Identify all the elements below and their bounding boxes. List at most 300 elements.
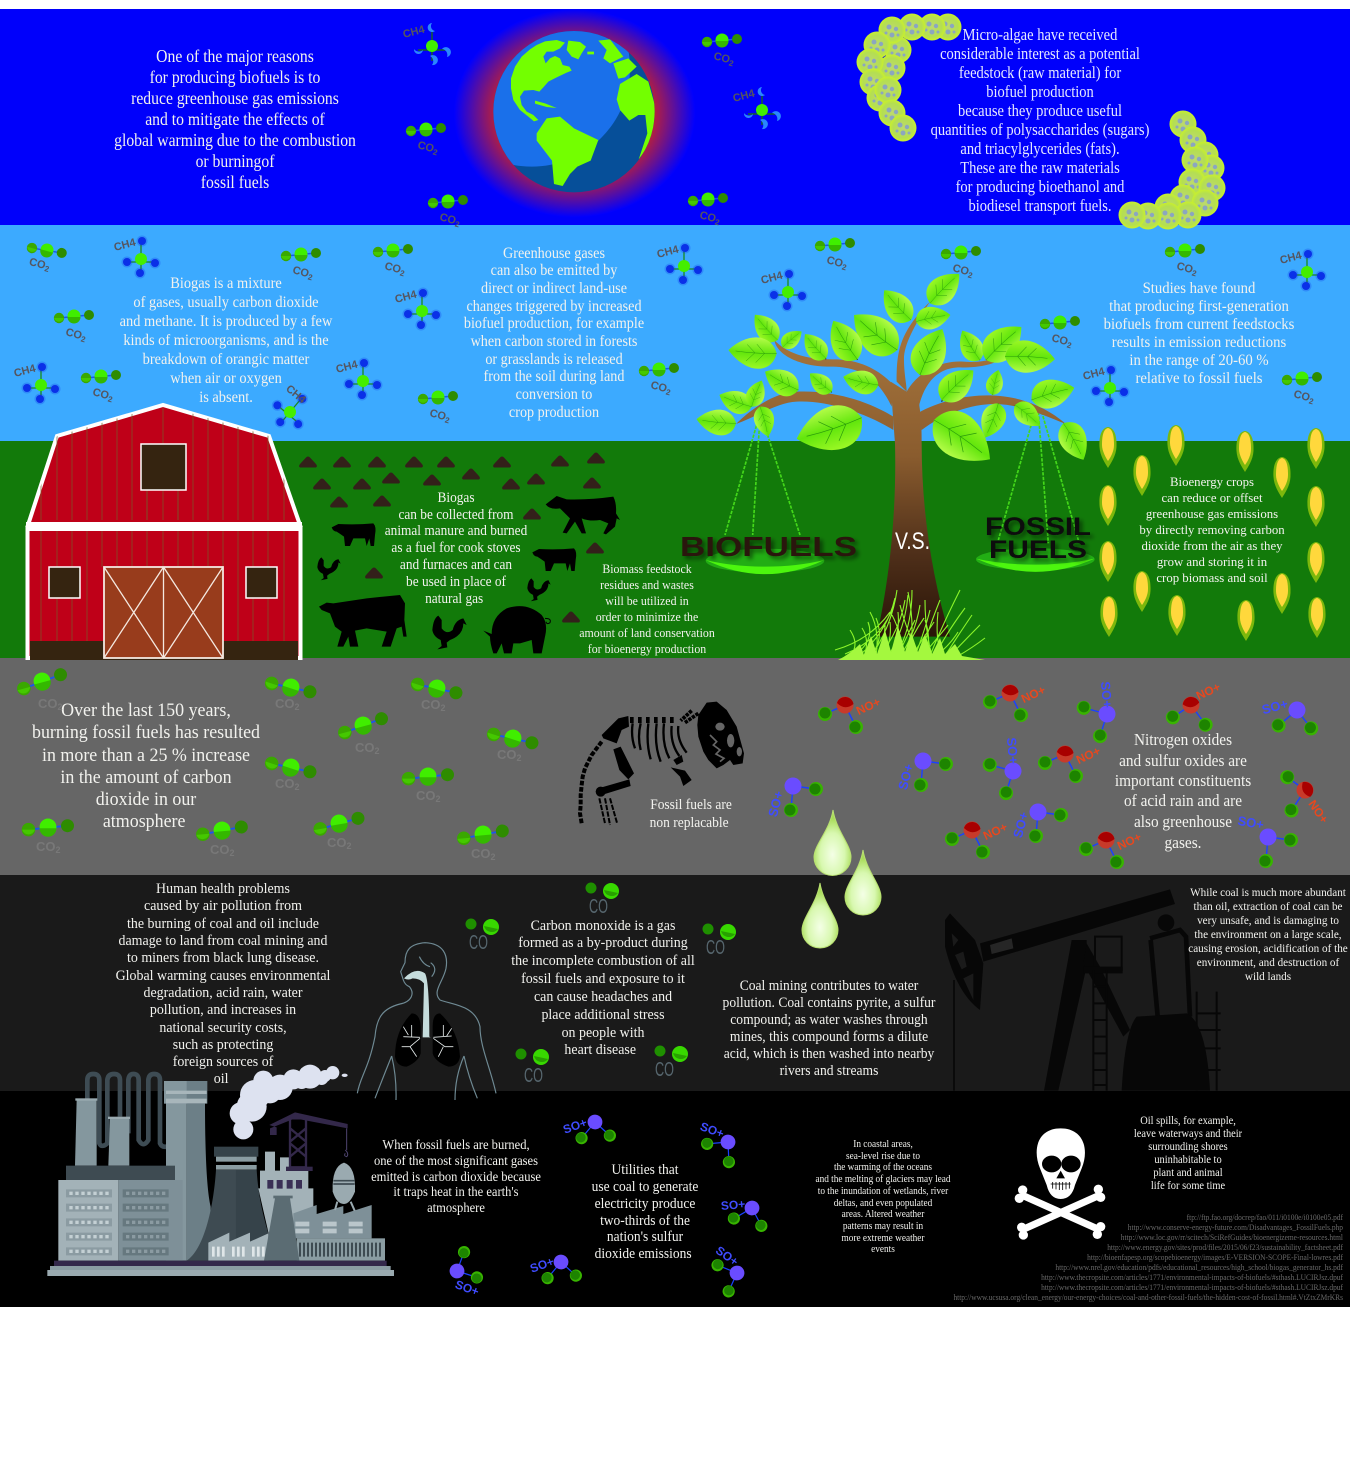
icon: dinosaur skeleton	[580, 702, 744, 825]
icon: CO2 molecule: 2	[440, 703, 446, 713]
text: source URLs: http://www.conserve-energy-future.com/Disadvantages_FossilFuels.php	[1128, 1223, 1343, 1232]
icon: SOx molecule	[1071, 681, 1117, 745]
text: carbon monoxide: on people with	[562, 1025, 645, 1041]
text: reasons for biofuels: and to mitigate the effects of	[145, 109, 325, 129]
icon: SOx molecule: SO+	[765, 789, 786, 819]
icon: earth globe with red glow	[456, 11, 694, 216]
icon: CO2 molecule: CO	[421, 697, 440, 712]
text: oil spills: surrounding shores	[1148, 1141, 1228, 1153]
icon: CO2 molecule: 2	[374, 746, 380, 756]
text: oil spills: leave waterways and their	[1134, 1128, 1243, 1140]
text: micro-algae: feedstock (raw material) for	[959, 64, 1122, 82]
panel: farm and biomass	[26, 264, 1326, 660]
text: human health problems: degradation, acid rain, water	[143, 985, 303, 1001]
text: coastal areas: sea-level rise due to	[846, 1151, 920, 1162]
icon: CO2 molecule: CO	[497, 747, 516, 762]
icon: SOx molecule: SO+	[561, 1115, 589, 1137]
text: bioenergy crops: by directly removing carbon	[1139, 523, 1285, 537]
text: carbon increase: atmosphere	[103, 810, 185, 832]
text: utilities sulfur: dioxide emissions	[595, 1247, 692, 1262]
text: land use emissions: or grasslands is released	[485, 351, 623, 368]
icon: CO2 molecule	[456, 823, 510, 862]
icon: CO2 molecule: CO	[416, 139, 435, 155]
icons: acid water drops	[802, 810, 881, 948]
icon: CO2 molecule: CO	[275, 776, 294, 791]
icon: CO2 molecule: CO	[712, 50, 731, 66]
icon: SOx molecule	[1236, 813, 1298, 868]
icon: CH4 molecule	[656, 242, 704, 286]
icon: CO molecule	[586, 882, 619, 918]
icon: factory	[47, 1074, 394, 1276]
text: source URLs: http://bioenfapesp.org/scopebioenergy/images/E-VERSION-SCOPE-Final-lowres.pdf	[1087, 1253, 1343, 1262]
text: oil spills: Oil spills, for example,	[1140, 1115, 1236, 1127]
icon: SOx molecule: SO+	[528, 1254, 556, 1276]
text: fossil fuels non replacable: non replacable	[650, 816, 729, 831]
icon: CO2 molecule	[81, 370, 121, 404]
icon: SOx molecule: SO+	[895, 762, 916, 792]
icon: CO2 molecule	[639, 362, 679, 397]
text: coastal areas: deltas, and even populated	[834, 1198, 932, 1209]
text: micro-algae: quantities of polysaccharides (sugars)	[931, 121, 1149, 139]
text: carbon increase: burning fossil fuels has resulted	[32, 721, 261, 743]
icon: CO2 molecule: 2	[436, 794, 441, 804]
text: biomass feedstock: Biomass feedstock	[602, 562, 693, 576]
icon: CO2 molecule: CO	[275, 696, 294, 711]
icon: CO2 molecule: CO	[951, 262, 970, 278]
label: V.S.: V.S.	[895, 528, 930, 555]
icon: NOx molecule: NO+	[854, 695, 883, 718]
text: biomass feedstock: will be utilized in	[605, 594, 689, 608]
icon: CO2 molecule: 2	[454, 219, 461, 229]
text: carbon monoxide: heart disease	[564, 1042, 636, 1058]
icon: CO2 molecule: 2	[307, 272, 314, 282]
icon: CO2 molecule	[409, 672, 464, 713]
text: bioenergy crops: can reduce or offset	[1161, 491, 1263, 505]
icon: NOx molecule	[1266, 762, 1331, 826]
icon: SOx molecule: SO+	[453, 1277, 481, 1299]
icon: CO2 molecule	[54, 310, 94, 344]
text: micro-algae: These are the raw materials	[960, 159, 1120, 177]
icon: CO2 molecule: CO	[28, 256, 47, 272]
icon: CO2 molecule	[373, 244, 413, 278]
icon: CO2 molecule: CO	[1050, 332, 1069, 348]
icon: CO2 molecule: CO	[355, 740, 374, 755]
text: utilities sulfur: two-thirds of the	[600, 1214, 690, 1229]
text: micro-algae: Micro-algae have received	[963, 26, 1118, 44]
icon: CO2 molecule	[402, 768, 454, 804]
text: carbon monoxide: the incomplete combustion of all	[511, 953, 695, 969]
text: biogas collection: animal manure and burned	[385, 524, 527, 539]
icon: CH4 molecule	[335, 358, 382, 400]
text: source URLs: ftp://ftp.fao.org/docrep/fao/011/i0100e/i0100e05.pdf	[1187, 1213, 1343, 1222]
icon: CO2 molecule: CO	[38, 696, 58, 711]
icon: CO2 molecule	[485, 722, 540, 763]
icon: NOx molecule: NO+	[981, 820, 1010, 843]
text: carbon dioxide heat: emitted is carbon dioxide because	[371, 1169, 541, 1184]
text: biogas collection: be used in place of	[406, 575, 506, 590]
icon: SOx molecule	[765, 778, 823, 819]
text: utilities sulfur: use coal to generate	[592, 1180, 698, 1195]
text: carbon monoxide: formed as a by-product during	[518, 935, 688, 951]
icon: CH4 molecule	[732, 87, 781, 129]
text: source URLs: http://www.loc.gov/rr/scitech/SciRefGuides/bioenergizeme-resources.html	[1121, 1233, 1344, 1242]
icon: NOx molecule	[1079, 830, 1144, 869]
text: oil spills: life for some time	[1151, 1180, 1225, 1192]
text: land use emissions: Greenhouse gases	[503, 245, 605, 262]
icon: CH4 molecule	[13, 362, 60, 404]
icons: farm animals	[317, 496, 620, 653]
icon: NOx molecule: NO+	[1074, 744, 1103, 767]
icon: CO2 molecule	[702, 34, 742, 68]
text: biomass feedstock: amount of land conservation	[579, 626, 715, 640]
text: coastal areas: patterns may result in	[843, 1221, 923, 1232]
text: source URLs: http://www.thecropsite.com/articles/1771/environmental-impacts-of-biofuels/#sthash.LUCIRJsz.dpuf	[1041, 1273, 1343, 1282]
text: human health problems: oil	[214, 1071, 228, 1087]
icon: SOx molecule	[977, 737, 1023, 802]
text: oil spills: plant and animal	[1153, 1167, 1223, 1179]
text: fossil fuels non replacable: Fossil fuels are	[650, 798, 732, 813]
heading: FOSSIL FUELS: FUELS	[989, 536, 1087, 564]
text: land use emissions: when carbon stored in forests	[471, 333, 638, 350]
text: reasons for biofuels: fossil fuels	[201, 172, 269, 192]
text: human health problems: the burning of coal and oil include	[127, 916, 319, 932]
icon: CO2 molecule	[195, 819, 249, 858]
text: coal extraction: than oil, extraction of coal can be	[1194, 900, 1342, 913]
text: human health problems: damage to land from coal mining and	[119, 933, 328, 949]
text: biogas collection: can be collected from	[398, 508, 514, 523]
text: oil spills: uninhabitable to	[1154, 1154, 1222, 1166]
icon: CO2 molecule: 2	[294, 702, 300, 712]
text: source URLs: http://www.energy.gov/sites/prod/files/2015/06/f23/sustainability_factsheet.pdf	[1107, 1243, 1343, 1252]
text: carbon monoxide: Carbon monoxide is a gas	[531, 918, 676, 934]
icon: CO2 molecule: CO	[649, 379, 668, 395]
icon: CO2 molecule: CO	[91, 386, 110, 402]
text: biomass feedstock: order to minimize the	[596, 610, 698, 624]
text: coal extraction: wild lands	[1245, 970, 1292, 983]
text: human health problems: pollution, and increases in	[150, 1002, 297, 1018]
text: carbon monoxide: place additional stress	[541, 1007, 665, 1023]
text: nitrogen and sulfur oxides: also greenhouse	[1134, 813, 1232, 831]
text: bioenergy crops: Bioenergy crops	[1170, 475, 1254, 489]
icon: CO2 molecule: CO	[327, 835, 346, 850]
icon: CO2 molecule: 2	[58, 702, 63, 712]
icon: CH4 molecule	[394, 288, 442, 330]
icon: CO2 molecule: CO	[416, 788, 436, 803]
icon: CH4 molecule	[760, 268, 808, 312]
icon: CO2 molecule: 2	[728, 58, 735, 68]
text: reasons for biofuels: for producing biofuels is to	[150, 67, 320, 87]
icon: SOx molecule	[1260, 696, 1324, 753]
icon: CO molecule: CO	[655, 1059, 674, 1081]
text: land use emissions: crop production	[509, 404, 600, 421]
icon: CO2 molecule: CO	[36, 839, 56, 854]
text: land use emissions: can also be emitted by	[491, 262, 618, 279]
text: coal mining water pollution: acid, which is then washed into nearby	[724, 1045, 935, 1062]
text: source URLs: http://www.thecropsite.com/articles/1771/environmental-impacts-of-biofuels/#sthash.LUCIRJsz.dpuf	[1041, 1283, 1343, 1292]
text: carbon monoxide: can cause headaches and	[534, 989, 673, 1005]
icon: red barn	[26, 405, 302, 660]
text: human health problems: national security costs,	[159, 1020, 287, 1036]
icon: CO2 molecule	[263, 671, 318, 712]
icon: algae chain upper	[856, 14, 962, 142]
icon: CH4 molecule: CH4	[656, 243, 681, 261]
icon: CO2 molecule	[335, 710, 391, 756]
icon: CH4 molecule: CH4	[283, 383, 309, 407]
text: coal extraction: environment, and destruction of	[1197, 956, 1339, 969]
text: coal mining water pollution: Coal mining contributes to water	[740, 977, 919, 994]
icon: CO2 molecule: CO	[438, 211, 457, 227]
text: carbon dioxide heat: it traps heat in the earth's	[393, 1184, 519, 1199]
icon: oil pump jack	[945, 889, 1221, 1091]
text: biogas mixture: Biogas is a mixture	[170, 274, 282, 292]
text: coastal areas: events	[871, 1244, 895, 1255]
text: bioenergy crops: greenhouse gas emissions	[1146, 507, 1278, 521]
text: coastal areas: areas. Altered weather	[842, 1209, 925, 1220]
text: micro-algae: biodiesel transport fuels.	[968, 197, 1112, 215]
icon: CH4 molecule: CH4	[394, 288, 419, 306]
text: biomass feedstock: for bioenergy production	[588, 642, 706, 656]
icon: CO molecule: CO	[524, 1065, 543, 1087]
icon: CO2 molecule	[428, 194, 468, 229]
text: coal extraction: the environment on a large scale,	[1194, 928, 1342, 941]
icon: CO2 molecule: 2	[43, 264, 51, 274]
text: human health problems: foreign sources of	[173, 1054, 273, 1070]
icon: skull and crossbones	[1015, 1128, 1105, 1240]
text: bioenergy crops: grow and storing it in	[1157, 555, 1268, 569]
icon: CO2 molecule: 2	[56, 845, 61, 855]
text: source URLs: http://www.ucsusa.org/clean_energy/our-energy-choices/coal-and-other-fossil-fuels/the-hidden-cost-of-fossil.html#.VtZtxZMrKRs	[953, 1293, 1343, 1302]
icon: SOx molecule: SO+	[1260, 696, 1290, 717]
text: biogas collection: natural gas	[425, 592, 483, 607]
icon: CO2 molecule: 2	[490, 852, 496, 862]
icon: CO2 molecule: 2	[399, 268, 406, 278]
text: emission reductions: Studies have found	[1143, 279, 1256, 297]
text: biogas mixture: breakdown of orangic matter	[143, 350, 309, 368]
icon: CH4 molecule: CH4	[760, 269, 785, 287]
text: nitrogen and sulfur oxides: important constituents	[1115, 772, 1251, 790]
icon: CO2 molecule	[1165, 244, 1205, 278]
text: coal extraction: While coal is much more abundant	[1190, 886, 1347, 899]
text: bioenergy crops: crop biomass and soil	[1156, 571, 1268, 585]
panel: greenhouse intro	[114, 0, 1226, 229]
icon: CO2 molecule: CO	[383, 260, 402, 276]
text: biogas collection: Biogas	[437, 491, 475, 506]
icon: CO2 molecule: CO	[64, 326, 83, 342]
icon: SOx molecule	[895, 752, 953, 792]
icon: CO2 molecule: CO	[825, 254, 844, 270]
icon: CO molecule: CO	[589, 896, 608, 918]
icon: CO2 molecule	[1040, 316, 1080, 350]
icon: CO molecule: CO	[469, 932, 488, 954]
text: emission reductions: that producing first-generation	[1109, 297, 1289, 315]
text: carbon increase: in the amount of carbon	[60, 766, 232, 788]
text: biogas mixture: kinds of microorganisms, and is the	[123, 331, 329, 349]
icon: CO2 molecule	[263, 751, 318, 792]
text: micro-algae: because they produce useful	[958, 102, 1122, 120]
icon: CO2 molecule: 2	[346, 841, 352, 851]
icon: CO molecule	[702, 924, 736, 959]
icon: CO2 molecule	[312, 810, 366, 851]
icon: SOx molecule: SO+	[1010, 810, 1031, 840]
text: coal mining water pollution: compound; as water washes through	[730, 1011, 928, 1028]
icon: CO2 molecule: 2	[967, 270, 974, 280]
icon: CH4 molecule: CH4	[732, 87, 757, 105]
icon: CO2 molecule: 2	[444, 415, 451, 425]
text: coal mining water pollution: mines, this compound forms a dilute	[730, 1028, 928, 1045]
icon: NOx molecule: NO+	[1115, 830, 1144, 853]
text: carbon increase: in more than a 25 % increase	[42, 744, 250, 766]
text: land use emissions: direct or indirect land-use	[481, 280, 627, 297]
icon: CH4 molecule	[113, 236, 160, 278]
icon: SOx molecule: SO+	[1004, 737, 1021, 765]
icon: SOx molecule	[698, 1119, 740, 1172]
icon: SOx molecule	[704, 1243, 746, 1300]
icon: NOx molecule	[1038, 744, 1103, 783]
icon: SOx molecule	[720, 1197, 773, 1245]
icon: CO2 molecule: 2	[516, 753, 522, 763]
heading: BIOFUELS: BIOFUELS	[680, 531, 857, 562]
icon: CH4 molecule	[1082, 364, 1130, 408]
panel: health and water	[116, 810, 1348, 1100]
text: nitrogen and sulfur oxides: and sulfur oxides are	[1119, 752, 1247, 770]
icon: CO2 molecule: 2	[665, 387, 672, 397]
icon: CO2 molecule: 2	[432, 147, 439, 157]
text: bioenergy crops: dioxide from the air as they	[1141, 539, 1283, 553]
icon: CH4 molecule: CH4	[1082, 365, 1107, 383]
heading: FOSSIL FUELS: FOSSIL	[985, 513, 1091, 541]
icon: SOx molecule	[528, 1251, 587, 1299]
icon: right scale pan and chains	[976, 412, 1095, 572]
icon: CO molecule	[516, 1048, 549, 1087]
text: reasons for biofuels: reduce greenhouse gas emissions	[131, 88, 339, 108]
text: human health problems: to miners from black lung disease.	[127, 950, 319, 966]
icon: tree	[695, 264, 1096, 637]
text: biomass feedstock: residues and wastes	[600, 578, 694, 592]
icon: SOx molecule	[1010, 804, 1068, 843]
icon: CO molecule	[466, 918, 499, 954]
text: coal mining water pollution: rivers and streams	[780, 1062, 879, 1079]
text: utilities sulfur: electricity produce	[595, 1197, 695, 1212]
icon: SOx molecule: SO+	[1098, 681, 1115, 709]
icon: CO2 molecule: 2	[1191, 268, 1198, 278]
icon: NOx molecule: NO+	[1019, 683, 1048, 706]
text: emission reductions: in the range of 20-60 %	[1129, 351, 1269, 369]
text: biogas collection: as a fuel for cook stoves	[391, 541, 521, 556]
icon: CH4 molecule: CH4	[402, 23, 427, 41]
text: source URLs: http://www.nrel.gov/education/pdfs/educational_resources/high_school/biogas_generator_hs.pdf	[1055, 1263, 1343, 1272]
text: land use emissions: changes triggered by increased	[466, 298, 642, 315]
text: nitrogen and sulfur oxides: gases.	[1165, 834, 1201, 852]
icon: left scale pan and chains	[706, 417, 824, 574]
icon: SOx molecule: SO+	[720, 1197, 746, 1213]
icon: CO2 molecule	[22, 238, 68, 277]
icon: CO2 molecule: 2	[230, 848, 235, 858]
text: land use emissions: conversion to	[516, 386, 592, 403]
text: land use emissions: biofuel production, for example	[464, 315, 645, 332]
icon: CO2 molecule	[688, 192, 728, 227]
icon: CO2 molecule: 2	[841, 262, 848, 272]
text: micro-algae: for producing bioethanol and	[956, 178, 1125, 196]
text: reasons for biofuels: global warming due to the combustion	[114, 130, 357, 150]
icon: SOx molecule	[561, 1111, 621, 1159]
icon: SOx molecule: SO+	[698, 1119, 726, 1141]
icon: CO2 molecule: CO	[1292, 388, 1311, 404]
text: coastal areas: to the inundation of wetlands, river	[818, 1186, 949, 1197]
icon: CH4 molecule: CH4	[335, 358, 360, 376]
icon: CO2 molecule: 2	[107, 394, 114, 404]
text: human health problems: Global warming causes environmental	[116, 968, 330, 984]
text: biogas mixture: and methane. It is produced by a few	[120, 312, 332, 330]
icon: CO2 molecule: CO	[210, 842, 230, 857]
text: coastal areas: and the melting of glaciers may lead	[815, 1174, 951, 1185]
icon: NOx molecule	[945, 820, 1010, 859]
icon: CO2 molecule: CO	[428, 407, 447, 423]
icon: CH4 molecule	[1279, 248, 1326, 292]
icon: CO2 molecule: 2	[714, 217, 721, 227]
icon: CO2 molecule	[406, 122, 446, 157]
text: coal extraction: causing erosion, acidification of the	[1188, 942, 1348, 955]
text: biogas mixture: is absent.	[199, 388, 253, 406]
text: emission reductions: biofuels from current feedstocks	[1104, 315, 1294, 333]
icon: CH4 molecule: CH4	[1279, 249, 1304, 267]
icon: SOx molecule: SO+	[713, 1243, 741, 1269]
text: land use emissions: from the soil during land	[484, 368, 625, 385]
icons: manure piles	[299, 452, 605, 622]
text: utilities sulfur: nation's sulfur	[607, 1230, 683, 1245]
text: human health problems: such as protecting	[173, 1037, 273, 1053]
icon: CO2 molecule: CO	[1175, 260, 1194, 276]
icon: SOx molecule: SO+	[1236, 813, 1265, 832]
icon: NOx molecule: NO+	[1305, 797, 1331, 826]
text: human health problems: Human health problems	[156, 881, 290, 897]
icon: CO2 molecule	[14, 666, 70, 712]
text: coal extraction: very unsafe, and is damaging to	[1197, 914, 1339, 927]
text: carbon increase: Over the last 150 years,	[61, 699, 231, 721]
text: biogas collection: and furnaces and can	[400, 558, 512, 573]
icon: CO2 molecule	[418, 390, 458, 425]
icon: CH4 molecule	[263, 381, 320, 439]
icon: CO2 molecule	[281, 248, 321, 282]
text: carbon dioxide heat: one of the most significant gases	[374, 1153, 538, 1168]
text: reasons for biofuels: One of the major reasons	[156, 46, 314, 66]
icon: CO2 molecule	[941, 246, 981, 280]
icon: CH4 molecule: CH4	[13, 362, 38, 380]
text: coastal areas: more extreme weather	[841, 1233, 925, 1244]
text: biogas mixture: when air or oxygen	[170, 369, 282, 387]
text: coastal areas: In coastal areas,	[853, 1139, 913, 1150]
text: carbon dioxide heat: When fossil fuels are burned,	[382, 1137, 530, 1152]
text: nitrogen and sulfur oxides: of acid rain and are	[1124, 792, 1242, 810]
icon: human lungs figure	[357, 943, 496, 1100]
text: carbon increase: dioxide in our	[96, 788, 197, 810]
text: utilities sulfur: Utilities that	[611, 1163, 679, 1178]
text: carbon monoxide: fossil fuels and exposure to it	[521, 971, 685, 987]
text: carbon dioxide heat: atmosphere	[427, 1200, 485, 1215]
text: micro-algae: and triacylglycerides (fats).	[960, 140, 1120, 158]
text: emission reductions: results in emission reductions	[1112, 333, 1286, 351]
icon: grass	[835, 590, 985, 660]
icons: corn cobs	[1099, 425, 1326, 641]
icon: CO2 molecule	[1282, 372, 1322, 406]
icon: CO2 molecule: CO	[471, 846, 490, 861]
panel: fossil fuel impacts	[47, 1065, 1344, 1302]
icon: CO2 molecule: 2	[1308, 396, 1315, 406]
icon: CO2 molecule	[815, 238, 855, 272]
icon: NOx molecule	[818, 695, 883, 734]
text: coastal areas: the warming of the oceans	[834, 1162, 932, 1173]
text: micro-algae: considerable interest as a potential	[940, 45, 1140, 63]
icon: CO2 molecule: 2	[294, 782, 300, 792]
